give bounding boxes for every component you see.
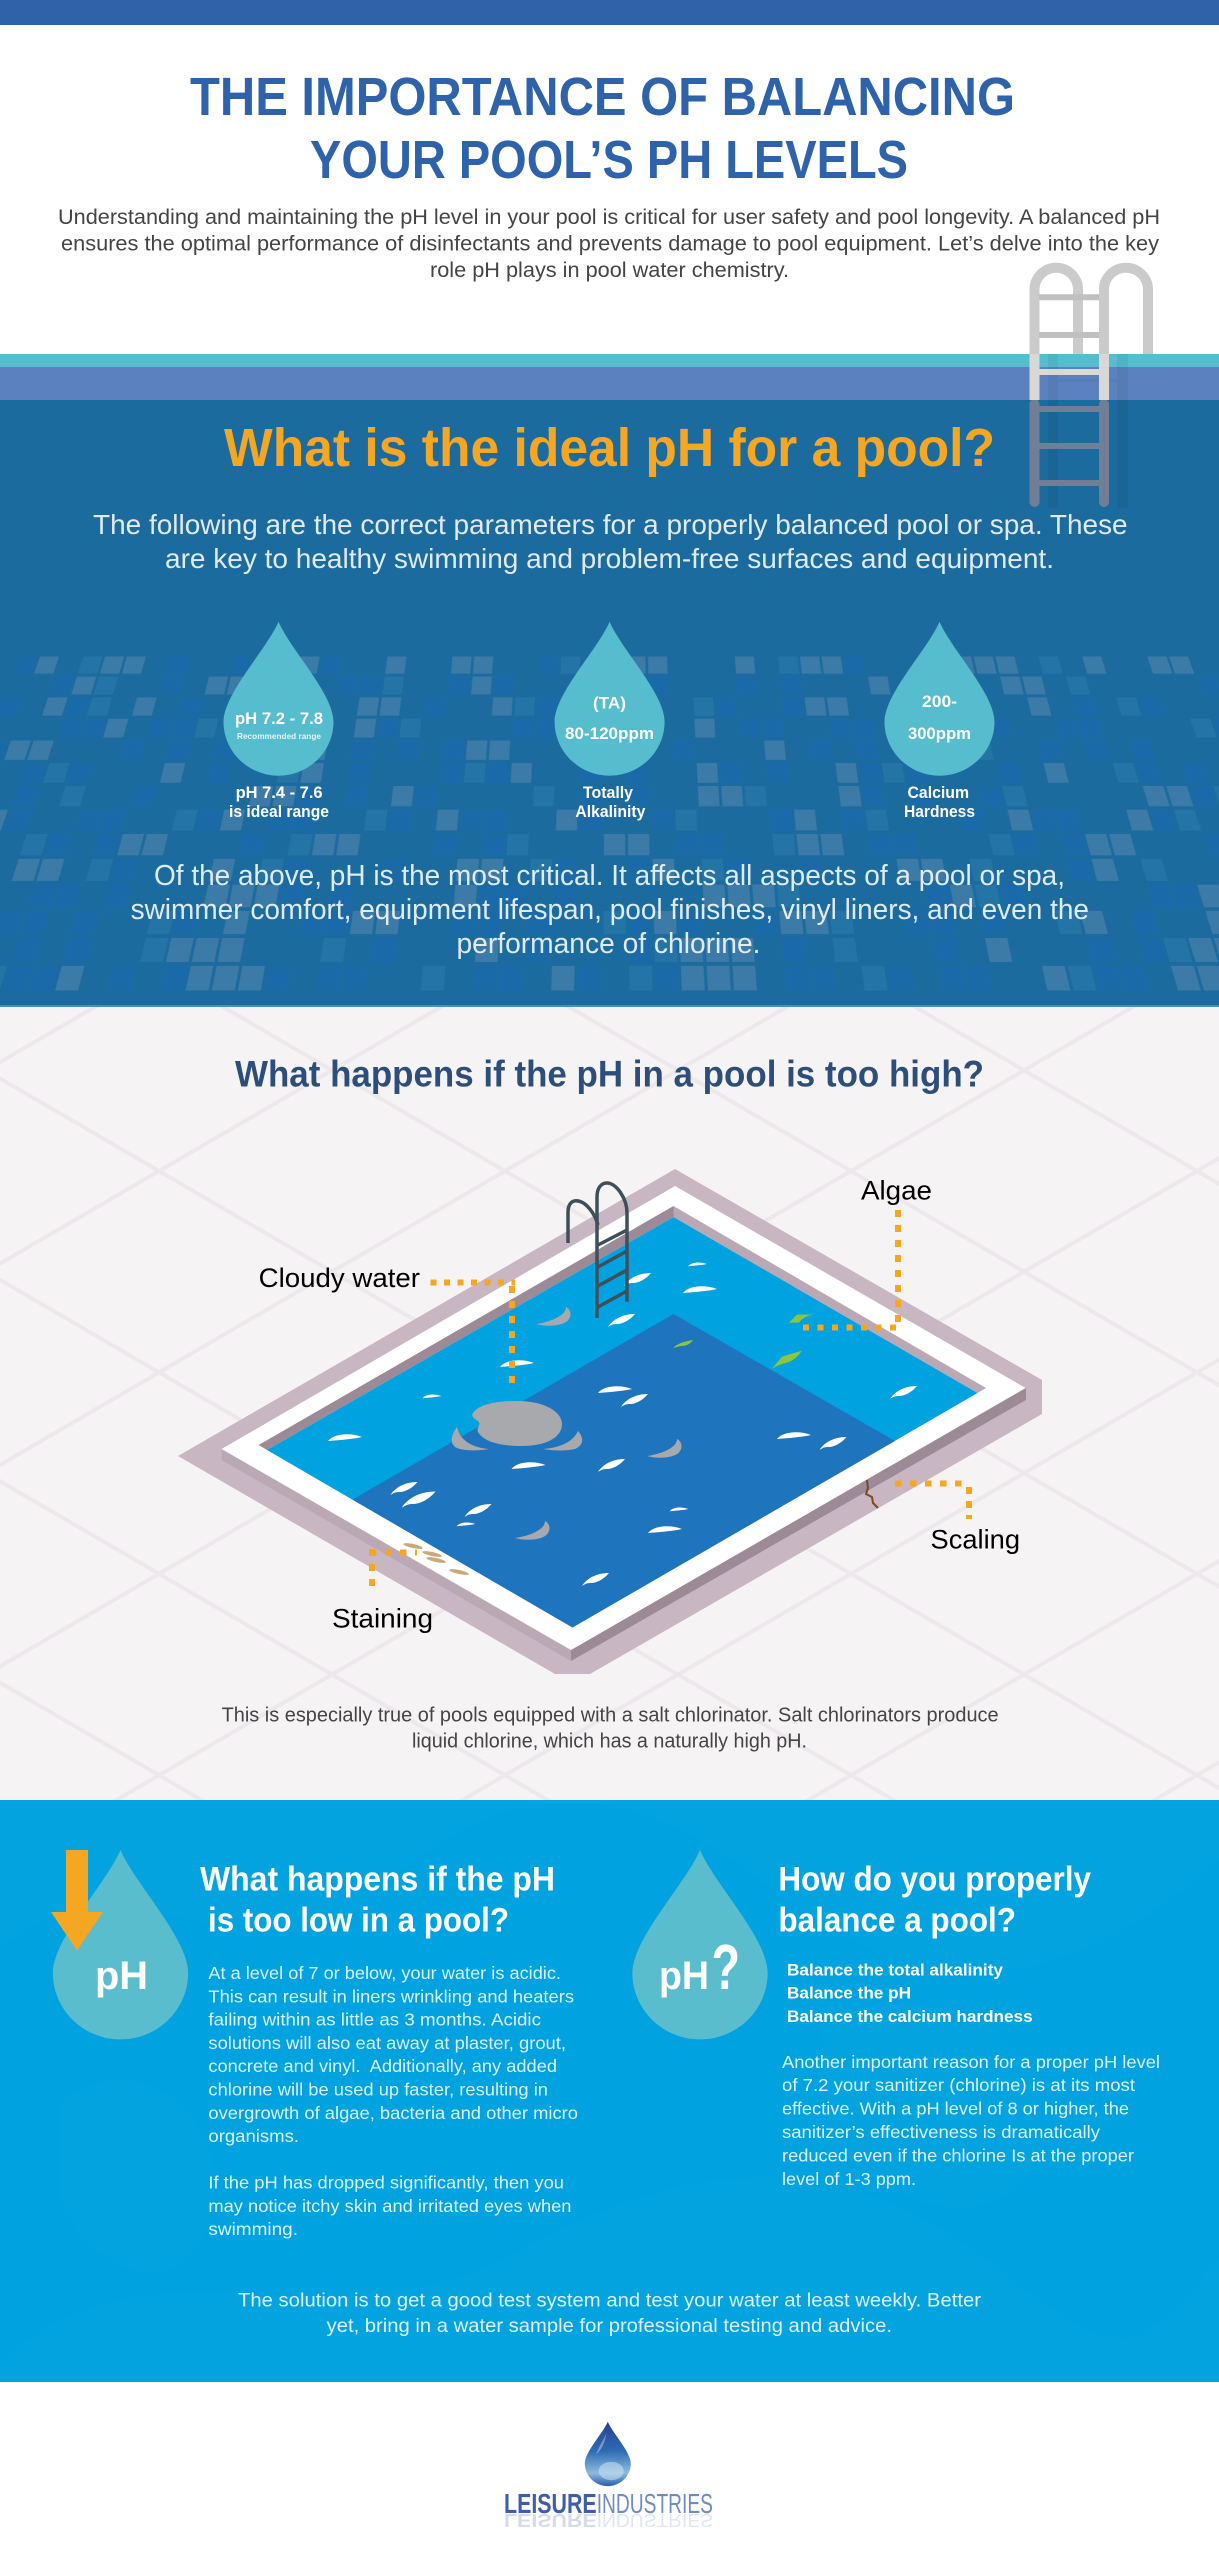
- text: salt chlorinator note: This is especially true of pools equipped with a salt chlorinator. Salt chlorinators produce: [222, 1705, 999, 1727]
- logo reflection: LEISURE: [504, 2509, 597, 2529]
- callout: staining: [332, 1549, 433, 1634]
- icon: pH question drop: [632, 1850, 768, 2039]
- drop: total alkalinity: Totally: [583, 784, 634, 802]
- text: salt chlorinator note: [222, 1705, 999, 1753]
- list: balance steps: Balance the total alkalinity: [787, 1961, 1004, 1980]
- drop: calcium hardness: Calcium: [908, 784, 969, 802]
- text: pH is most critical: [131, 860, 1089, 960]
- icon: pool ladder: [1034, 268, 1148, 508]
- drop: pH range: [224, 622, 334, 821]
- title: YOUR POOL’S PH LEVELS: [310, 130, 908, 190]
- drop: calcium hardness: [884, 622, 994, 821]
- text: sanitizer explanation: of 7.2 your sanitizer (chlorine) is at its most: [782, 2075, 1135, 2095]
- panel: too high background with floor tiles: [0, 1007, 1219, 1800]
- crack: [866, 1480, 878, 1508]
- text: low pH explanation: At a level of 7 or below, your water is acidic.: [208, 1963, 561, 1983]
- text: sanitizer explanation: [782, 2052, 1160, 2189]
- logo reflection: [504, 2509, 713, 2529]
- text: sanitizer explanation: level of 1-3 ppm.: [782, 2169, 916, 2189]
- pool illustration: [178, 1169, 1042, 1674]
- intro text: role pH plays in pool water chemistry.: [430, 259, 789, 282]
- algae patches: [673, 1315, 813, 1369]
- drop: calcium hardness: Hardness: [904, 803, 975, 821]
- drop: total alkalinity: [555, 622, 665, 821]
- text: pH is most critical: swimmer comfort, equipment lifespan, pool finishes, vinyl liners, and even the: [131, 894, 1089, 926]
- title: THE IMPORTANCE OF BALANCING: [190, 67, 1015, 127]
- drop: pH range: is ideal range: [229, 803, 329, 821]
- water ripples: [328, 1262, 917, 1586]
- text: low pH explanation: If the pH has dropped significantly, then you: [208, 2173, 564, 2193]
- text: sanitizer explanation: Another important reason for a proper pH level: [782, 2052, 1160, 2072]
- text: low pH explanation: concrete and vinyl. Additionally, any added: [208, 2056, 557, 2076]
- drop: pH range: pH 7.2 - 7.8: [235, 710, 323, 728]
- text: pH is most critical: performance of chlorine.: [456, 928, 760, 960]
- drop: total alkalinity: 80-120ppm: [565, 725, 654, 743]
- text: sanitizer explanation: sanitizer’s effectiveness is dramatically: [782, 2122, 1100, 2142]
- panel: ideal pH water background: [0, 400, 1219, 1007]
- text: low pH explanation: solutions will also eat away at plaster, grout,: [208, 2033, 566, 2053]
- logo: Leisure Industries: [504, 2422, 713, 2529]
- logo drop: [585, 2422, 631, 2486]
- intro text: Understanding and maintaining the pH level in your pool is critical for user safety and pool longevity. A balanced pH: [58, 206, 1160, 229]
- pool water: [267, 1217, 978, 1628]
- text: solution: The solution is to get a good test system and test your water at least weekly. Better: [238, 2290, 982, 2312]
- text: low pH explanation: swimming.: [208, 2219, 298, 2239]
- text: sanitizer explanation: reduced even if the chlorine Is at the proper: [782, 2146, 1134, 2166]
- drop: total alkalinity: Alkalinity: [575, 803, 646, 821]
- drop: calcium hardness: 200-: [922, 693, 957, 711]
- panel: low pH and balance background: [0, 1800, 1219, 2382]
- heading: pH too low: [200, 1861, 555, 1940]
- drop: pH range: Recommended range: [237, 731, 321, 741]
- pool deck: [178, 1169, 1042, 1674]
- pool white rim: [222, 1186, 1026, 1650]
- list: balance steps: Balance the calcium hardness: [787, 2007, 1033, 2026]
- pool deep end: [352, 1314, 895, 1628]
- band: periwinkle water line: [0, 367, 1219, 400]
- icon: pH drop with down arrow: [51, 1850, 188, 2039]
- text: parameters intro: are key to healthy swimming and problem-free surfaces and equipment.: [165, 543, 1054, 574]
- callout: cloudy water: Cloudy water: [259, 1263, 420, 1293]
- water crescents: [515, 1307, 682, 1540]
- list: balance steps: [787, 1961, 1033, 2026]
- icon: pH drop with down arrow: pH: [95, 1954, 148, 1998]
- list: balance steps: Balance the pH: [787, 1984, 911, 2003]
- heading: pH too low: What happens if the pH: [200, 1861, 555, 1899]
- intro text: ensures the optimal performance of disinfectants and prevents damage to pool equipment. Let’s delve into the key: [61, 232, 1160, 256]
- text: low pH explanation: [208, 1963, 578, 2239]
- drop: pH range: pH 7.4 - 7.6: [236, 784, 323, 802]
- rock with ripples: [452, 1401, 582, 1450]
- callout: scaling: Scaling: [930, 1525, 1020, 1555]
- panel bottom edge: [0, 1005, 1219, 1007]
- drop: calcium hardness: 300ppm: [908, 725, 971, 743]
- pool inner walls: [259, 1206, 674, 1450]
- band: teal water line: [0, 354, 1219, 367]
- title: [190, 67, 1015, 190]
- logo reflection: INDUSTRIES: [597, 2509, 713, 2529]
- ladder in pool: [568, 1183, 627, 1318]
- callout: scaling: [895, 1484, 1020, 1555]
- text: low pH explanation: This can result in liners wrinkling and heaters: [208, 1986, 574, 2006]
- intro text: [58, 206, 1160, 282]
- text: solution: [238, 2290, 982, 2337]
- text: low pH explanation: chlorine will be used up faster, resulting in: [208, 2080, 548, 2100]
- text: low pH explanation: organisms.: [208, 2126, 299, 2146]
- text: parameters intro: The following are the correct parameters for a properly balanced pool or spa. These: [93, 509, 1128, 540]
- icon: pH question drop: pH: [659, 1954, 709, 1998]
- top bar: [0, 0, 1219, 25]
- text: low pH explanation: overgrowth of algae, bacteria and other micro: [208, 2103, 578, 2123]
- heading: balance a pool: How do you properly: [778, 1861, 1091, 1899]
- text: pH is most critical: Of the above, pH is the most critical. It affects all aspects of a pool or spa,: [154, 860, 1065, 892]
- logo wordmark: LEISURE: [504, 2488, 597, 2519]
- text: low pH explanation: failing within as little as 3 months. Acidic: [208, 2010, 541, 2030]
- logo: Leisure Industries: INDUSTRIES: [597, 2488, 713, 2519]
- callout: algae: Algae: [861, 1176, 932, 1206]
- text: solution: yet, bring in a water sample for professional testing and advice.: [327, 2315, 892, 2337]
- heading: ideal pH: What is the ideal pH for a pool?: [224, 418, 995, 478]
- pool tile floor pattern: [0, 656, 1219, 990]
- heading: balance a pool: [778, 1861, 1091, 1940]
- text: parameters intro: [93, 509, 1128, 574]
- text: salt chlorinator note: liquid chlorine, which has a naturally high pH.: [412, 1731, 807, 1753]
- stains: [403, 1542, 469, 1576]
- icon: pH question drop: ?: [712, 1931, 740, 2003]
- drop: total alkalinity: (TA): [593, 695, 626, 713]
- text: low pH explanation: may notice itchy skin and irritated eyes when: [208, 2196, 572, 2216]
- heading: balance a pool: balance a pool?: [778, 1902, 1016, 1940]
- text: sanitizer explanation: effective. With a pH level of 8 or higher, the: [782, 2099, 1129, 2119]
- heading: pH too low: is too low in a pool?: [208, 1902, 509, 1940]
- callout: staining: Staining: [332, 1604, 433, 1634]
- heading: pH too high: What happens if the pH in a pool is too high?: [235, 1054, 984, 1095]
